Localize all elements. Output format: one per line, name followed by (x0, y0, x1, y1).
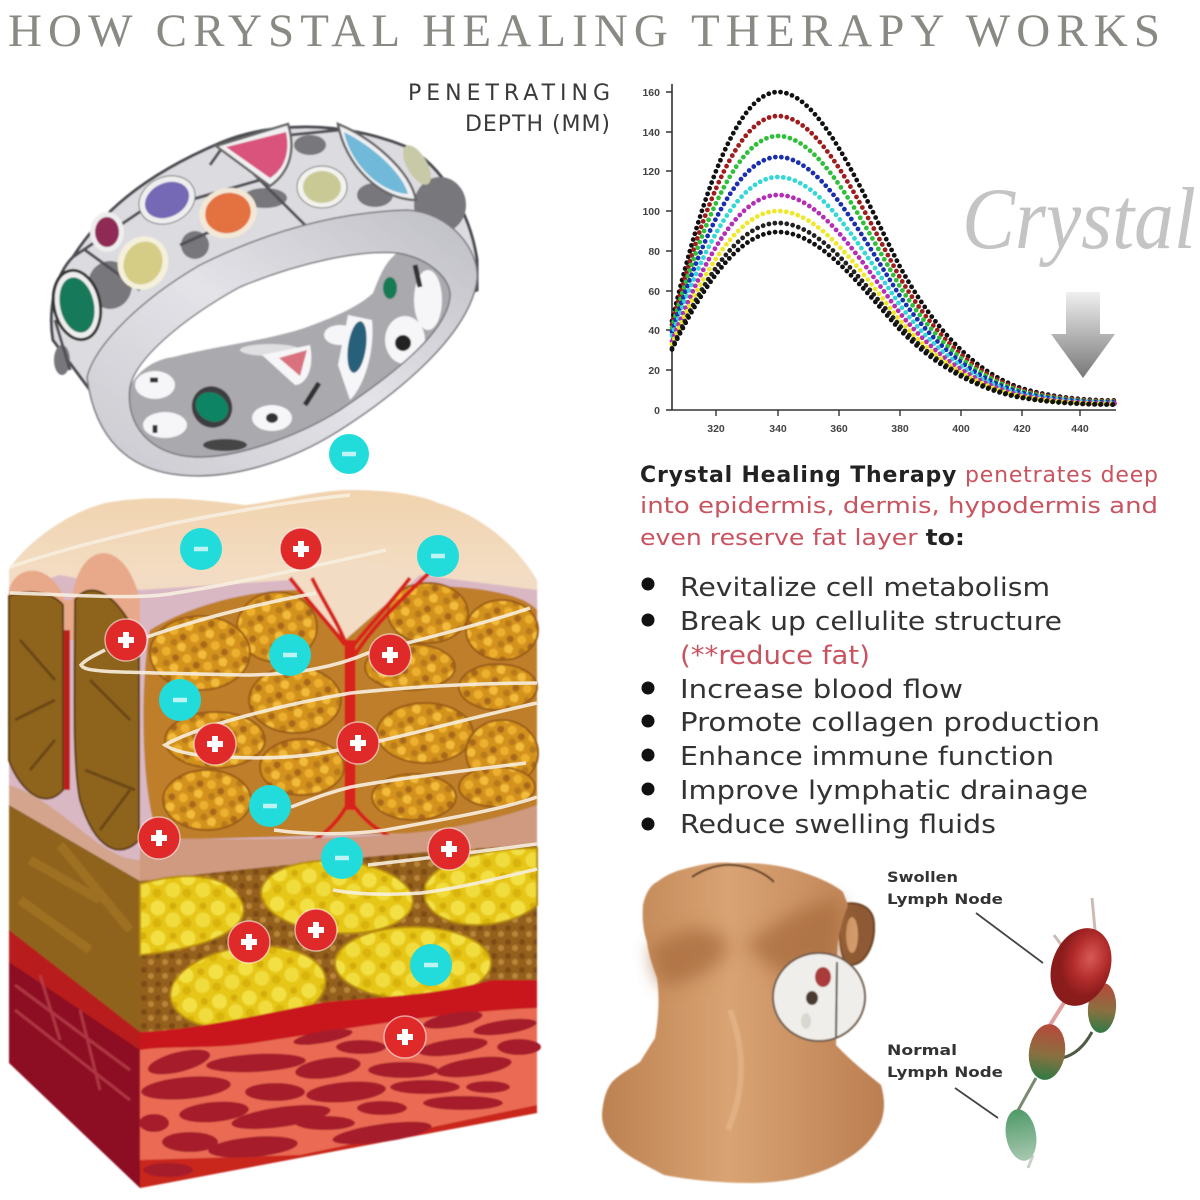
epidermis top surface (9, 490, 538, 640)
left face fat columns (9, 592, 63, 799)
text block: description: Crystal Healing Therapy penetrates deep (640, 463, 1158, 488)
left vessel (64, 630, 70, 790)
upper gems (47, 266, 107, 344)
chart label: penetrating depth: DEPTH (MM) (465, 112, 610, 137)
head and shoulders (602, 862, 884, 1183)
bullet list: benefits: Break up cellulite structure (680, 607, 1062, 637)
inner band cutouts (135, 270, 442, 438)
bullet list: benefits (642, 573, 1100, 840)
y axis labels: 120 (642, 166, 660, 178)
band metal detail (54, 135, 466, 375)
under-jaw shadow (650, 900, 842, 985)
lymph node labels: Swollen (887, 870, 958, 886)
x axis labels: 380 (891, 423, 909, 435)
x axis labels: 340 (769, 423, 787, 435)
lymph node labels (887, 870, 1003, 1081)
neck illustration (602, 862, 884, 1183)
negative ions (159, 434, 459, 986)
y axis labels: 60 (648, 286, 660, 298)
ring opening (129, 253, 450, 457)
x axis labels (707, 423, 1089, 435)
left face hypodermis (9, 805, 140, 1035)
bullet list: benefits: Revitalize cell metabolism (680, 573, 1050, 603)
inner gems (184, 379, 240, 435)
pale wedge between lobes (285, 560, 425, 640)
inner dark marks (150, 265, 420, 433)
chin crease (692, 865, 774, 882)
inner band (129, 253, 450, 457)
y axis labels: 100 (642, 206, 660, 218)
white energy swirl lines (10, 495, 537, 894)
lavender dermal fold (9, 575, 537, 885)
y axis labels (642, 87, 660, 417)
x axis labels: 420 (1013, 423, 1031, 435)
y axis labels: 0 (654, 405, 660, 417)
magnifier with lymph nodes (773, 953, 865, 1041)
positive ions (105, 528, 470, 1058)
title: HOW CRYSTAL HEALING THERAPY WORKS (8, 5, 1160, 57)
ring lip (87, 210, 477, 476)
skin cross-section diagram (9, 434, 541, 1188)
y axis labels: 140 (642, 127, 660, 139)
muscle layer left face (9, 930, 140, 1188)
muscle layer right face (140, 980, 537, 1188)
bullet list: benefits: (**reduce fat) (680, 641, 870, 671)
orange fat lobes (150, 583, 538, 830)
dotted curves (672, 92, 1115, 405)
chart label: penetrating depth (408, 81, 610, 137)
chart label: penetrating depth: PENETRATING (408, 81, 610, 106)
gem band (51, 127, 477, 400)
bullet list: benefits: Increase blood flow (680, 675, 963, 705)
lymph node chain (1002, 898, 1122, 1168)
y axis labels: 40 (648, 325, 660, 337)
pointer lines to lymph nodes (955, 913, 1043, 1118)
text block: description (640, 463, 1158, 551)
x axis labels: 320 (707, 423, 725, 435)
text block: description: into epidermis, dermis, hypodermis and (640, 494, 1158, 519)
axes (672, 84, 1116, 410)
bullet list: benefits: Enhance immune function (680, 742, 1054, 772)
lymph node labels: Lymph Node (887, 1065, 1003, 1081)
ring illustration (47, 124, 477, 476)
lymph node labels: Normal (887, 1043, 957, 1059)
x axis labels: 400 (952, 423, 970, 435)
text block: description: even reserve fat layer to: (640, 526, 965, 551)
bullet list: benefits: Promote collagen production (680, 708, 1100, 738)
hypodermis layer (140, 845, 537, 1035)
y axis labels: 80 (648, 246, 660, 258)
yellow fat lobes (140, 848, 537, 1038)
red vessels (290, 572, 430, 842)
lymph node labels: Lymph Node (887, 892, 1003, 908)
line chart: penetrating depth by wavelength (642, 84, 1116, 435)
x axis labels: 440 (1071, 423, 1089, 435)
y axis labels: 20 (648, 365, 660, 377)
muscle fibres (139, 1008, 541, 1177)
bullet list: benefits: Reduce swelling fluids (680, 810, 996, 840)
neck highlight (728, 1010, 741, 1130)
skin tissue layers (9, 490, 541, 1188)
dermis band (9, 785, 537, 881)
left face arches (9, 553, 140, 640)
arrow: down to crystal curve (1051, 292, 1115, 378)
bullet list: benefits: Improve lymphatic drainage (680, 776, 1088, 806)
ear (839, 903, 874, 965)
cellulite layer base (143, 585, 537, 840)
y axis labels: 160 (642, 87, 660, 99)
x axis labels: 360 (830, 423, 848, 435)
